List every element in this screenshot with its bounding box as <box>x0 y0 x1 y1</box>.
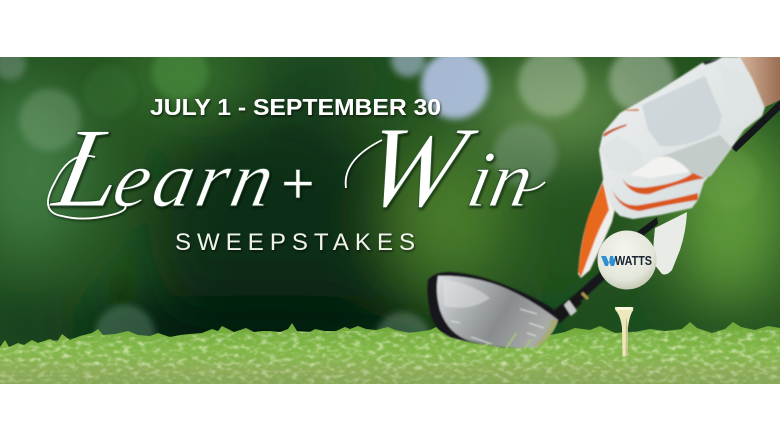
word: Win: in <box>460 136 541 224</box>
orange trim accents <box>622 173 704 194</box>
golf ball <box>598 230 656 290</box>
orange and white index finger <box>578 178 616 278</box>
club shaft, upper section <box>731 100 780 152</box>
subtitle: SWEEPSTAKES <box>175 229 415 256</box>
driver club head <box>427 271 606 350</box>
finger fold <box>630 157 690 178</box>
date heading: JULY 1 - SEPTEMBER 30 <box>150 94 441 120</box>
word: Learn: earn <box>106 136 286 224</box>
back of hand panel <box>642 76 722 146</box>
bokeh circles <box>0 57 752 336</box>
golf glove <box>599 57 765 219</box>
word: Win: W <box>353 103 486 232</box>
blurred green background <box>0 57 780 347</box>
head shell <box>427 272 559 348</box>
wrist fold <box>718 62 762 128</box>
supporting finger <box>653 212 687 274</box>
golf tee <box>615 307 633 356</box>
face lines <box>451 309 544 344</box>
script flourishes <box>48 140 545 219</box>
banner photo <box>0 43 780 384</box>
plus sign: + <box>281 151 315 216</box>
wrist strap <box>702 57 722 65</box>
title: Learn + Win <box>43 103 548 232</box>
word: Learn: L <box>43 104 135 231</box>
club shaft, middle section <box>634 217 658 240</box>
grass <box>0 322 780 384</box>
lower shaft and hosel <box>574 272 605 302</box>
palm shadow <box>660 135 732 180</box>
logo mark <box>601 256 617 266</box>
head face <box>437 276 558 348</box>
face sheen <box>443 280 490 308</box>
forearm <box>738 57 780 107</box>
WATTS logo: WATTS <box>615 254 652 268</box>
grass blades over head <box>440 333 548 350</box>
